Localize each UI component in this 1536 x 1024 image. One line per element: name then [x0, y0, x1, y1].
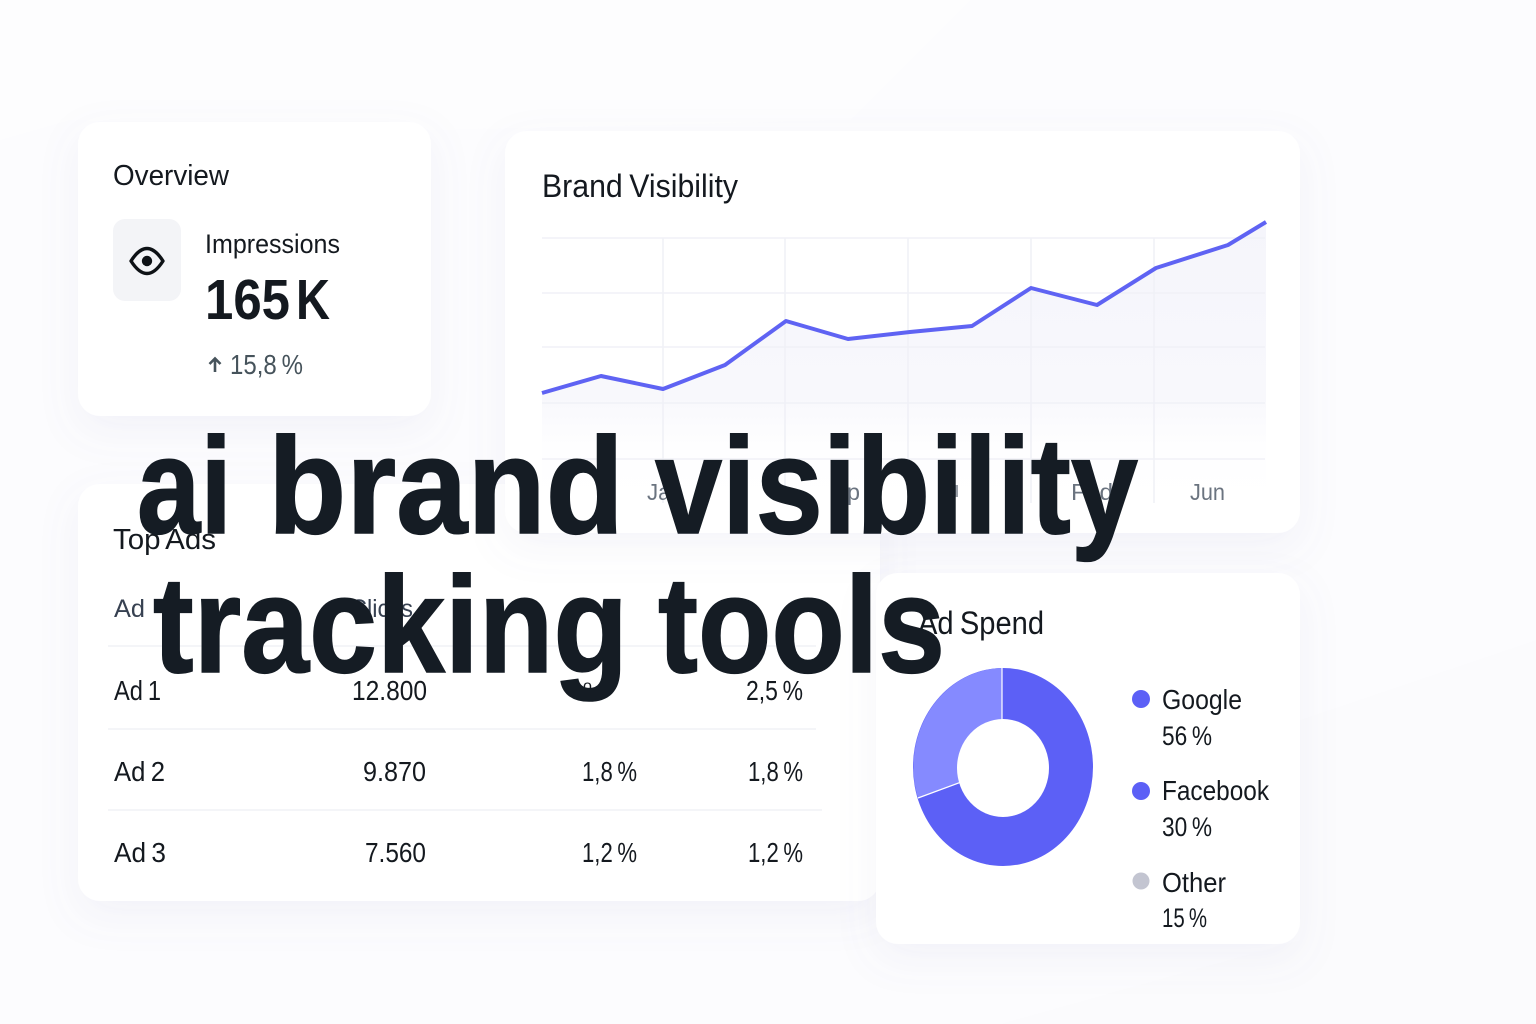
- heading: top ads: Top Ads: [113, 524, 216, 556]
- table header: [114, 595, 413, 623]
- row: ad 1: o: [583, 678, 592, 695]
- axis labels: Fnd: [1071, 479, 1113, 505]
- legend: 15 %: [1162, 903, 1207, 933]
- table header: Clicks: [350, 595, 413, 623]
- metric: 165 K: 165: [205, 268, 290, 332]
- panel: overview: [78, 122, 431, 416]
- metric: 165 K: K: [296, 268, 330, 332]
- legend: [1132, 684, 1270, 933]
- axis labels: n: [980, 479, 990, 505]
- row: ad 1: 2,5 %: [746, 675, 803, 706]
- row: ad 3: 1,2 %: [748, 837, 803, 868]
- heading: brand visibility: Brand Visibility: [542, 168, 738, 204]
- title: [137, 410, 1138, 702]
- title: tracking: [153, 549, 628, 702]
- axis labels: p: [847, 479, 860, 505]
- label: impressions: Impressions: [205, 229, 340, 259]
- row: ad 1: 12.800: [352, 675, 427, 706]
- axis labels: Jan: [647, 479, 683, 505]
- title: visibility: [655, 410, 1138, 563]
- line chart: [542, 222, 1266, 503]
- title: tools: [658, 549, 945, 702]
- row: ad 3: Ad 3: [114, 837, 166, 868]
- title: ai: [137, 410, 232, 563]
- legend: Facebook: [1162, 775, 1270, 806]
- axis labels: Jun: [1190, 479, 1225, 505]
- row: ad 2: [114, 756, 803, 787]
- row: ad 2: 1,8 %: [748, 756, 803, 787]
- axis labels: [647, 479, 1225, 505]
- panel: top ads: [78, 484, 880, 901]
- table header: Ad: [114, 595, 145, 623]
- row: ad 2: Ad 2: [114, 756, 165, 787]
- heading: ad spend: Ad Spend: [918, 605, 1044, 641]
- title: brand: [268, 410, 624, 563]
- row: ad 2: 1,8 %: [582, 756, 637, 787]
- panel: brand visibility: [505, 131, 1300, 533]
- row: ad 3: 7.560: [365, 837, 426, 868]
- icon: eye: [113, 219, 181, 301]
- row: ad 1: Ad 1: [114, 675, 161, 706]
- row: ad 2: 9.870: [363, 756, 426, 787]
- legend: Google: [1162, 684, 1242, 715]
- row: ad 3: [114, 837, 803, 868]
- legend: 56 %: [1162, 721, 1212, 751]
- legend: 30 %: [1162, 812, 1212, 842]
- heading: overview: Overview: [113, 160, 230, 192]
- row: ad 3: 1,2 %: [582, 837, 637, 868]
- change: up 15,8 %: 15,8 %: [230, 349, 303, 380]
- panel: ad spend: [876, 573, 1300, 944]
- change: up 15,8 %: [210, 349, 303, 380]
- legend: Other: [1162, 867, 1226, 898]
- donut chart: [913, 668, 1093, 866]
- row: ad 1: [114, 675, 803, 706]
